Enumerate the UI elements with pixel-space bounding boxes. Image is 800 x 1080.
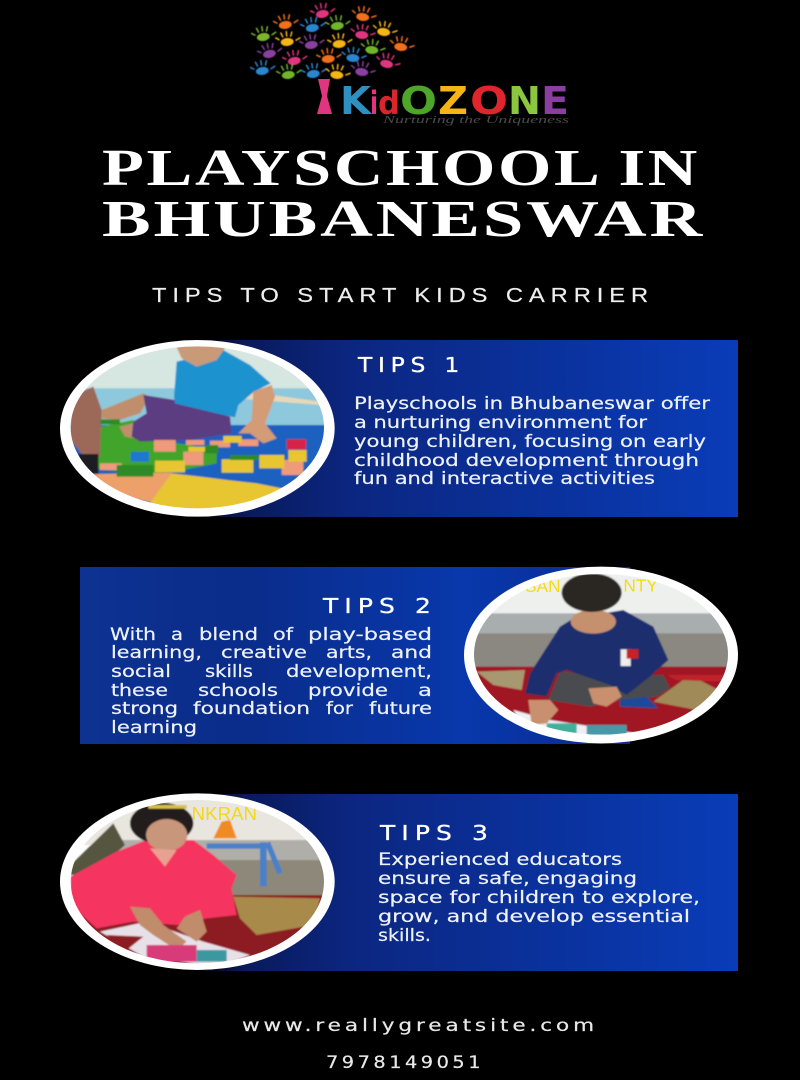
- logo wordmark: K: [340, 79, 373, 123]
- tip 2 text: strong: [111, 699, 178, 718]
- logo wordmark: [340, 79, 569, 123]
- logo wordmark: d: [378, 84, 400, 122]
- photo: girl in pink dress: [60, 793, 335, 970]
- tip 2 text: With: [110, 625, 156, 644]
- logo wordmark: N: [508, 79, 541, 123]
- logo tagline: Nurturing the Uniqueness: [381, 114, 569, 126]
- photo: boy in blue hoodie on carpet: [464, 567, 738, 743]
- tip 3 text: ensure a safe, engaging: [378, 869, 637, 888]
- tip 2 text: these: [111, 681, 168, 700]
- tip 1 text: a nurturing environment for: [354, 413, 647, 432]
- photo: child playing with foam blocks: [60, 340, 335, 517]
- tip 1 text: childhood development through: [354, 451, 699, 470]
- tip 2 text: foundation: [193, 699, 310, 718]
- panel: tip 2: [80, 567, 738, 744]
- footer phone: 7978149051: [326, 1053, 484, 1072]
- tip 2 text: creative: [221, 643, 307, 662]
- title: [102, 140, 705, 248]
- icon: handprint tree: [250, 1, 415, 80]
- tip 2 text: skills: [205, 662, 253, 681]
- panel background: [196, 794, 738, 971]
- tip 2 text: provide: [308, 681, 388, 700]
- tip 3 text: space for children to explore,: [378, 888, 700, 907]
- tip 1 text: [354, 394, 710, 488]
- tip 3 text: grow, and develop essential: [378, 907, 690, 926]
- subtitle: TIPS TO START KIDS CARRIER: [152, 285, 654, 307]
- logo: KidoZone: [250, 1, 569, 126]
- tip 2 text: and: [391, 643, 432, 662]
- tip 3 text: skills.: [378, 926, 431, 945]
- photo banner lettering: NKRAN: [192, 803, 257, 824]
- panel background: [80, 567, 630, 744]
- title: PLAYSCHOOL IN: [102, 140, 700, 197]
- tip 2 text: future: [369, 699, 432, 718]
- logo wordmark: O: [400, 79, 437, 123]
- tip 2 heading: TIPS 2: [322, 594, 437, 618]
- photo banner lettering: SAN: [525, 576, 561, 596]
- tip 2 text: of: [273, 625, 294, 644]
- panel: tip 3: [60, 793, 738, 971]
- panel: tip 1: [60, 340, 738, 517]
- tip 2 text: [110, 625, 432, 737]
- tip 2 text: blend: [199, 625, 258, 644]
- logo wordmark: i: [370, 84, 378, 122]
- tip 2 text: play-based: [308, 625, 432, 644]
- tip 2 text: arts,: [326, 643, 372, 662]
- tip 3 text: [378, 850, 700, 945]
- tip 1 heading: TIPS 1: [357, 353, 465, 377]
- tip 3 text: Experienced educators: [378, 850, 622, 869]
- tip 3 heading: TIPS 3: [379, 821, 494, 845]
- title: BHUBANESWAR: [102, 191, 705, 248]
- panel background: [196, 340, 738, 517]
- tip 1 text: Playschools in Bhubaneswar offer: [354, 394, 710, 413]
- tip 2 text: development,: [286, 662, 432, 681]
- tip 2 text: social: [111, 662, 171, 681]
- photo banner lettering: [526, 580, 656, 592]
- tip 2 text: for: [326, 699, 353, 718]
- photo banner lettering: NTY: [623, 575, 658, 595]
- logo wordmark: O: [470, 79, 508, 123]
- tip 2 text: a: [171, 625, 183, 644]
- tip 2 text: a: [418, 681, 432, 700]
- logo wordmark: Z: [438, 79, 468, 123]
- footer website: www.reallygreatsite.com: [242, 1016, 598, 1035]
- tip 2 text: learning: [111, 718, 197, 737]
- icon: tree trunk: [317, 79, 332, 114]
- tip 1 text: young children, focusing on early: [354, 432, 706, 451]
- tip 2 text: learning,: [111, 643, 202, 662]
- logo wordmark: E: [541, 79, 569, 123]
- tip 2 text: schools: [198, 681, 278, 700]
- tip 1 text: fun and interactive activities: [354, 469, 655, 488]
